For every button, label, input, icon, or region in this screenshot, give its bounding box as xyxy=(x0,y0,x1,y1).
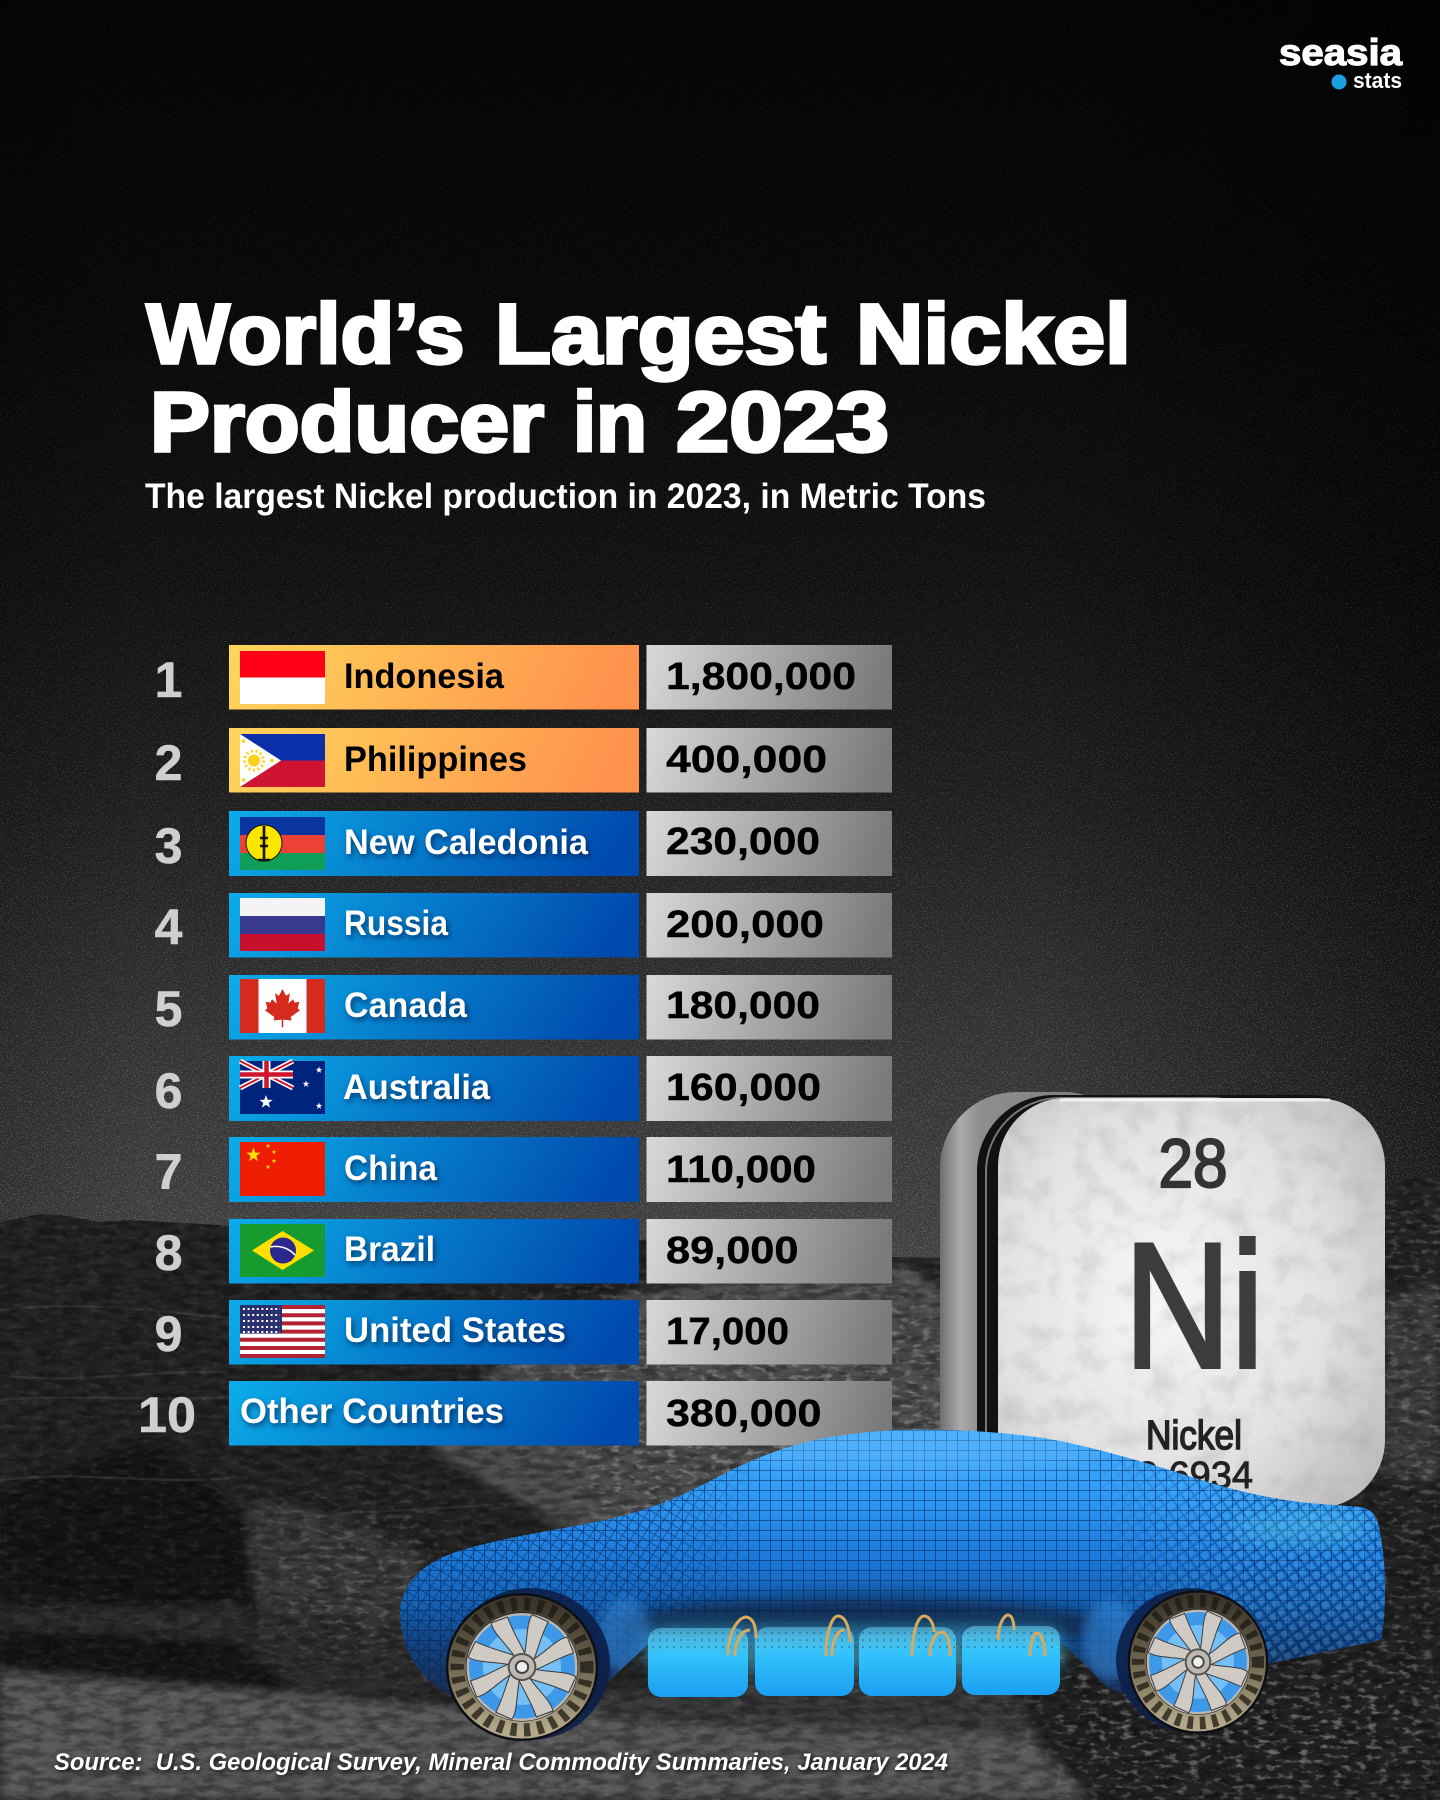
row 3: New Caledonia: 230,000 xyxy=(666,821,820,863)
row 2: Philippines: 2 xyxy=(155,735,182,791)
battery pack xyxy=(648,1626,1060,1697)
row 1: Indonesia: Indonesia xyxy=(344,657,505,696)
row 10: Other Countries: 380,000 xyxy=(666,1393,822,1435)
logo: seasia stats: stats xyxy=(1353,68,1402,93)
row 1: Indonesia xyxy=(155,645,892,710)
car body mesh xyxy=(400,1430,1385,1696)
logo: seasia stats xyxy=(1279,32,1402,93)
row 2: Philippines: Philippines xyxy=(344,740,527,779)
title: Largest xyxy=(495,287,826,381)
row 5: Canada: Canada xyxy=(344,986,468,1025)
row 4: Russia: 4 xyxy=(155,899,183,955)
row 6: Australia xyxy=(155,1056,892,1121)
row 1: Indonesia: 1,800,000 xyxy=(666,656,856,698)
nickel element tile: 58.6934 xyxy=(1116,1455,1253,1497)
title: Nickel xyxy=(856,287,1131,381)
wheel arches xyxy=(450,1588,610,1740)
title xyxy=(146,287,1131,469)
rear wheel xyxy=(1128,1590,1268,1734)
row 5: Canada: 5 xyxy=(155,981,182,1037)
nickel element tile: Ni xyxy=(1124,1206,1264,1405)
electric car with battery pack xyxy=(395,1425,1395,1741)
title: World’s xyxy=(146,287,464,381)
row 3: New Caledonia xyxy=(155,811,892,876)
row 10: Other Countries xyxy=(138,1381,892,1446)
nickel element tile: 28 xyxy=(1158,1125,1228,1202)
row 2: Philippines xyxy=(155,728,892,792)
row 6: Australia: 160,000 xyxy=(666,1067,821,1109)
row 9: United States xyxy=(155,1300,892,1364)
title: 2023 xyxy=(676,375,889,469)
row 7: China: 110,000 xyxy=(666,1149,816,1191)
row 6: Australia: 6 xyxy=(155,1063,182,1119)
row 8: Brazil: 8 xyxy=(155,1225,182,1281)
row 7: China xyxy=(155,1137,892,1202)
row 3: New Caledonia: 3 xyxy=(155,818,182,874)
row 10: Other Countries: Other Countries xyxy=(240,1392,504,1431)
nickel element tile xyxy=(940,1092,1385,1512)
row 9: United States: 9 xyxy=(155,1306,182,1362)
row 9: United States: 17,000 xyxy=(666,1311,789,1353)
row 3: New Caledonia: New Caledonia xyxy=(344,823,589,862)
table rows xyxy=(138,645,892,1446)
row 6: Australia: Australia xyxy=(343,1068,491,1107)
title: in xyxy=(573,375,647,469)
source note: Source: U.S. Geological Survey, Mineral Commodity Summaries, January 2024 xyxy=(54,1749,948,1776)
row 7: China: 7 xyxy=(155,1144,182,1200)
row 2: Philippines: 400,000 xyxy=(666,739,827,781)
row 8: Brazil: Brazil xyxy=(344,1230,435,1269)
subtitle: The largest Nickel production in 2023, in Metric Tons xyxy=(145,477,986,516)
title: Producer xyxy=(150,375,544,469)
row 7: China: China xyxy=(344,1149,438,1188)
terrace lines xyxy=(0,1305,518,1531)
row 4: Russia: 200,000 xyxy=(666,904,824,946)
row 5: Canada xyxy=(155,975,892,1040)
row 8: Brazil: 89,000 xyxy=(666,1230,798,1272)
front wheel xyxy=(446,1593,598,1741)
logo: seasia stats: seasia xyxy=(1279,32,1402,73)
battery glow xyxy=(645,1626,1065,1672)
row 10: Other Countries: 10 xyxy=(138,1387,196,1443)
row 8: Brazil xyxy=(155,1219,892,1284)
row 9: United States: United States xyxy=(344,1311,566,1350)
row 1: Indonesia: 1 xyxy=(155,652,182,708)
row 4: Russia: Russia xyxy=(344,904,448,943)
background: rocky mine terrain xyxy=(0,1170,1440,1800)
nickel element tile: Nickel xyxy=(1146,1412,1242,1458)
battery wiring xyxy=(728,1615,1045,1656)
row 5: Canada: 180,000 xyxy=(666,985,820,1027)
row 4: Russia xyxy=(155,893,892,958)
background: dark grainy sky xyxy=(0,102,1440,1258)
